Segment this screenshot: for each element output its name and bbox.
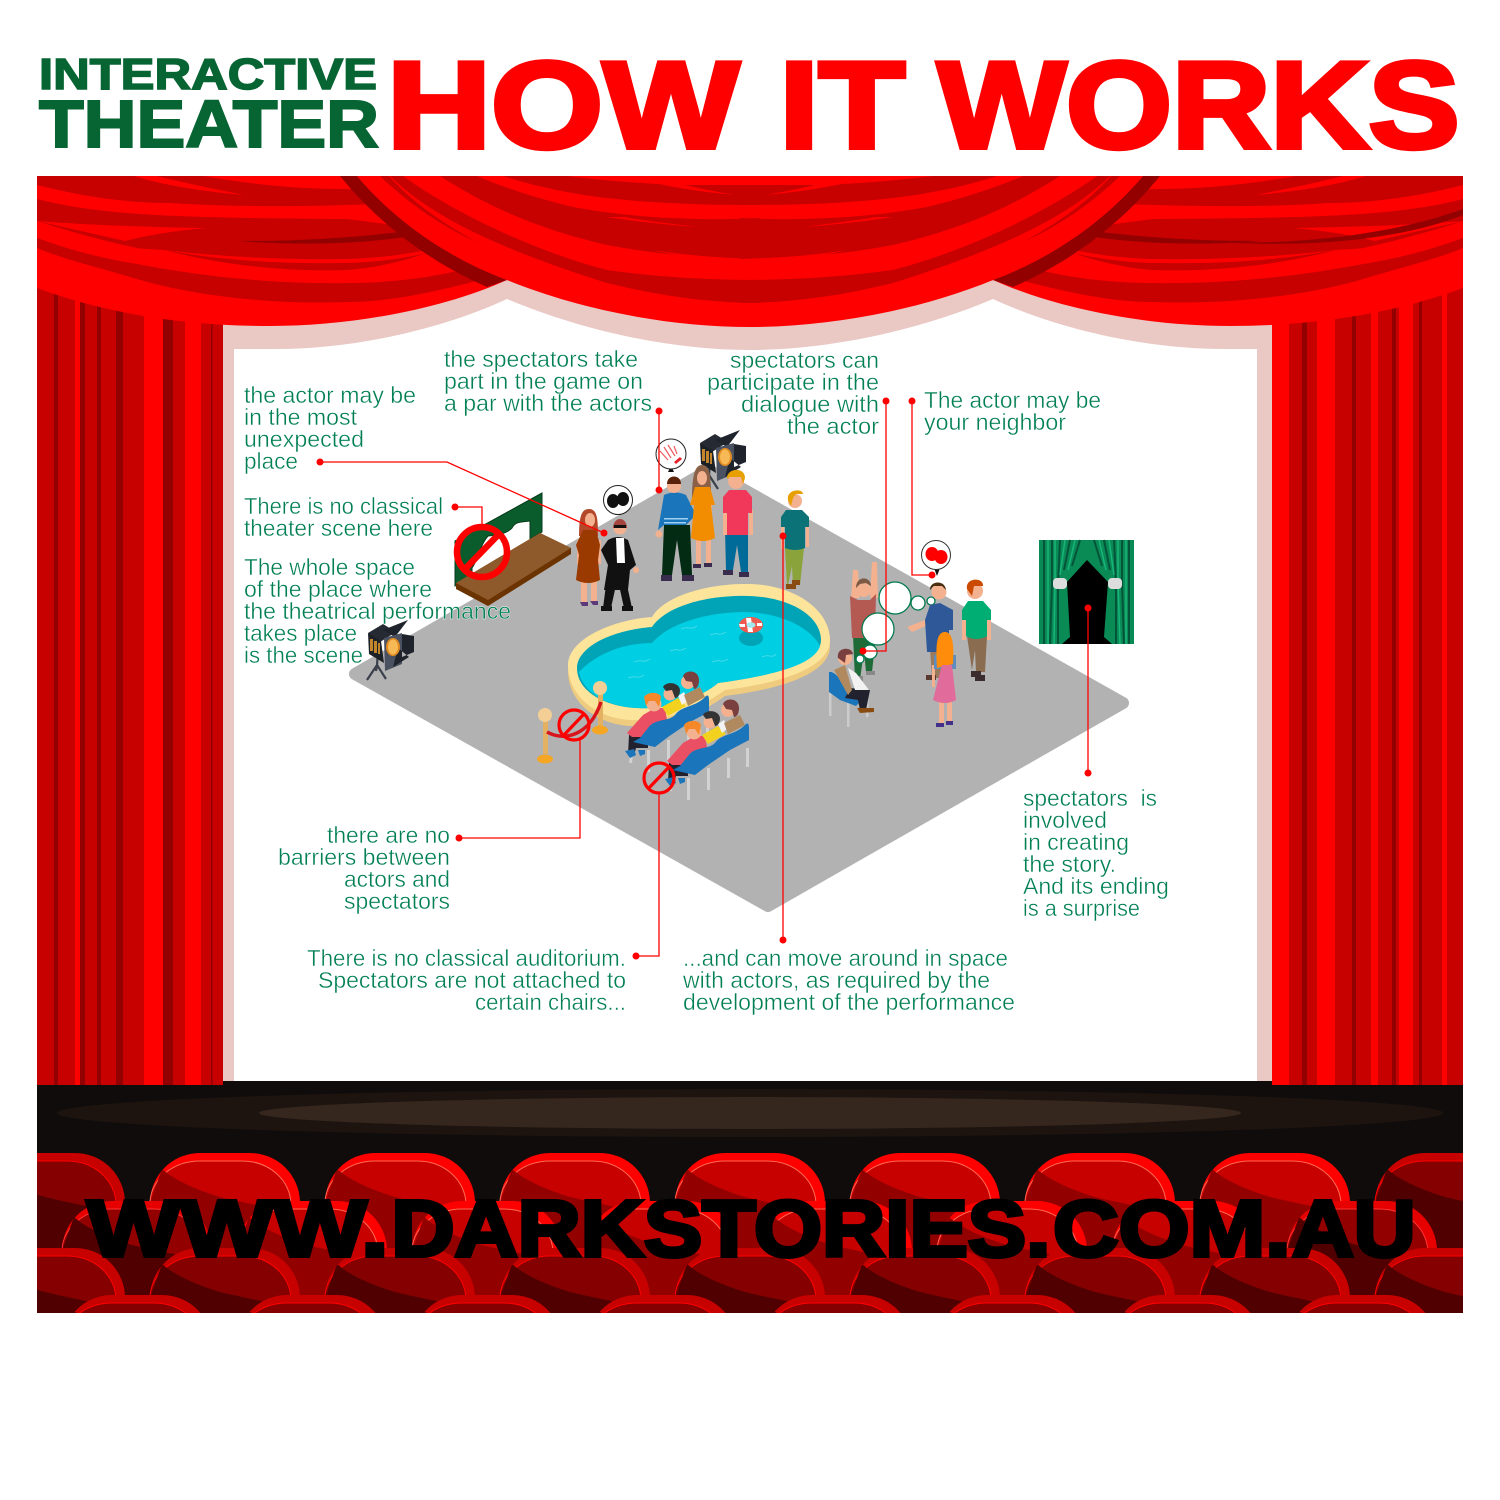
annotation: whole space: [244, 554, 511, 668]
annotation: neighbor: The actor may be: [924, 387, 1101, 413]
woman in orange dress: [690, 465, 715, 568]
annotation: no classical scene: There is no classical: [244, 493, 443, 519]
thought bubbles: [856, 582, 935, 663]
stage opening frame: [223, 240, 1272, 1085]
annotation: whole space: is the scene: [244, 642, 363, 668]
annotation: story ending: in creating: [1023, 829, 1129, 855]
stage spotlight left: [367, 620, 414, 680]
title: How it works: WORKS: [938, 38, 1460, 174]
panel: theater stage: [37, 176, 1463, 1313]
man in blue shirt: [907, 582, 953, 680]
right side curtain: [1272, 280, 1463, 1086]
annotation: unexpected place: unexpected: [244, 426, 364, 452]
annotation: no barriers: actors and: [344, 866, 450, 892]
annotation: dialogue: spectators can: [730, 347, 879, 373]
annotation: move around: ...and can move around in space: [683, 945, 1008, 971]
annotation: whole space: takes place: [244, 620, 357, 646]
title: Interactive Theater: THEATER: [39, 87, 379, 162]
annotation: story ending: the story.: [1023, 851, 1116, 877]
annotation: unexpected place: [244, 382, 416, 474]
annotation: whole space: The whole space: [244, 554, 415, 580]
man with raised arms: [850, 562, 878, 681]
annotation: unexpected place: place: [244, 448, 298, 474]
annotation: neighbor: your neighbor: [924, 409, 1066, 435]
annotation: story ending: is a surprise: [1023, 895, 1140, 921]
annotation: no barriers: barriers between: [278, 844, 450, 870]
annotation: dialogue: the actor: [787, 413, 879, 439]
no sign over barrier: [559, 710, 589, 740]
website url: COM.: [1053, 1184, 1291, 1273]
right valance: [980, 176, 1463, 326]
annotation: no barriers: there are no: [327, 822, 450, 848]
woman in pink dress: [932, 632, 956, 727]
annotation: no auditorium: Spectators are not attached to: [318, 967, 626, 993]
life buoy: [739, 617, 763, 646]
speech bubble: clapping hands: [656, 439, 686, 472]
man in green shirt: [962, 580, 991, 681]
annotation: no auditorium: There is no classical auditorium.: [307, 945, 626, 971]
annotation: story ending: involved: [1023, 807, 1107, 833]
no sign over chairs: [644, 763, 674, 793]
annotation: spectators take part: the spectators take: [444, 346, 638, 372]
annotation: move around: [682, 945, 1015, 1015]
man in pink shirt: [723, 470, 753, 577]
gray isometric floor: [355, 470, 1123, 906]
annotation: story ending: And its ending: [1023, 873, 1169, 899]
audience row two: [665, 699, 749, 800]
title: Interactive Theater: INTERACTIVE: [39, 50, 377, 99]
speech bubble: black theatre masks: [604, 486, 632, 515]
classical stage: [455, 493, 571, 606]
annotation: no classical scene: [244, 493, 443, 541]
left valance: [37, 176, 520, 326]
center swag: [357, 176, 1143, 327]
white backdrop: [234, 299, 1257, 1085]
left side curtain: [37, 280, 223, 1086]
annotation: move around: with actors, as required by the: [682, 967, 990, 993]
man in teal shirt: [781, 490, 809, 589]
title: How it works: [387, 38, 1460, 174]
actor in tuxedo: [601, 519, 639, 611]
stage floor: [37, 1081, 1463, 1201]
website url: DARKSTORIES.: [391, 1184, 1050, 1273]
annotation: spectators take part: part in the game on: [444, 368, 643, 394]
annotation: whole space: of the place where: [244, 576, 432, 602]
open green curtain: [1039, 540, 1134, 644]
website url: WWW.: [87, 1184, 389, 1273]
title: How it works: IT: [780, 38, 905, 174]
annotation: dialogue: participate in the: [707, 369, 879, 395]
annotation: story ending: [1023, 785, 1169, 921]
audience row one: [625, 671, 709, 772]
woman in red dress: [576, 509, 601, 606]
website url: AU: [1292, 1184, 1416, 1273]
man in blue sweater: [656, 476, 696, 581]
annotation: unexpected place: in the most: [244, 404, 357, 430]
stage spotlight top: [699, 430, 746, 490]
connector lines: [316, 398, 1092, 960]
annotation: spectators take part: a par with the actors: [444, 390, 652, 416]
swimming pool: [568, 584, 830, 726]
annotation: no auditorium: [307, 945, 626, 1015]
title: Interactive Theater: [39, 50, 379, 162]
annotation: dialogue: [707, 347, 879, 439]
annotation: unexpected place: the actor may be: [244, 382, 416, 408]
annotation: no barriers: [278, 822, 450, 914]
annotation: neighbor: [924, 387, 1101, 435]
annotation: dialogue: dialogue with: [741, 391, 879, 417]
annotation: no auditorium: certain chairs...: [475, 989, 626, 1015]
website url: [87, 1184, 1416, 1273]
annotation: no barriers: spectators: [344, 888, 450, 914]
title: How it works: HOW: [387, 38, 739, 174]
annotation: move around: development of the performance: [683, 989, 1015, 1015]
no sign over stage: [457, 527, 507, 577]
velvet rope barrier: [537, 681, 608, 764]
annotation: spectators take part: [444, 346, 652, 416]
auditorium seats: [37, 1153, 1463, 1313]
annotation: story ending: spectators is: [1023, 785, 1157, 811]
speech bubble: red theatre masks: [922, 540, 950, 576]
annotation: whole space: the theatrical performance: [244, 598, 511, 624]
annotation: no classical scene: theater scene here: [244, 515, 433, 541]
seated man on chair: [829, 649, 874, 727]
